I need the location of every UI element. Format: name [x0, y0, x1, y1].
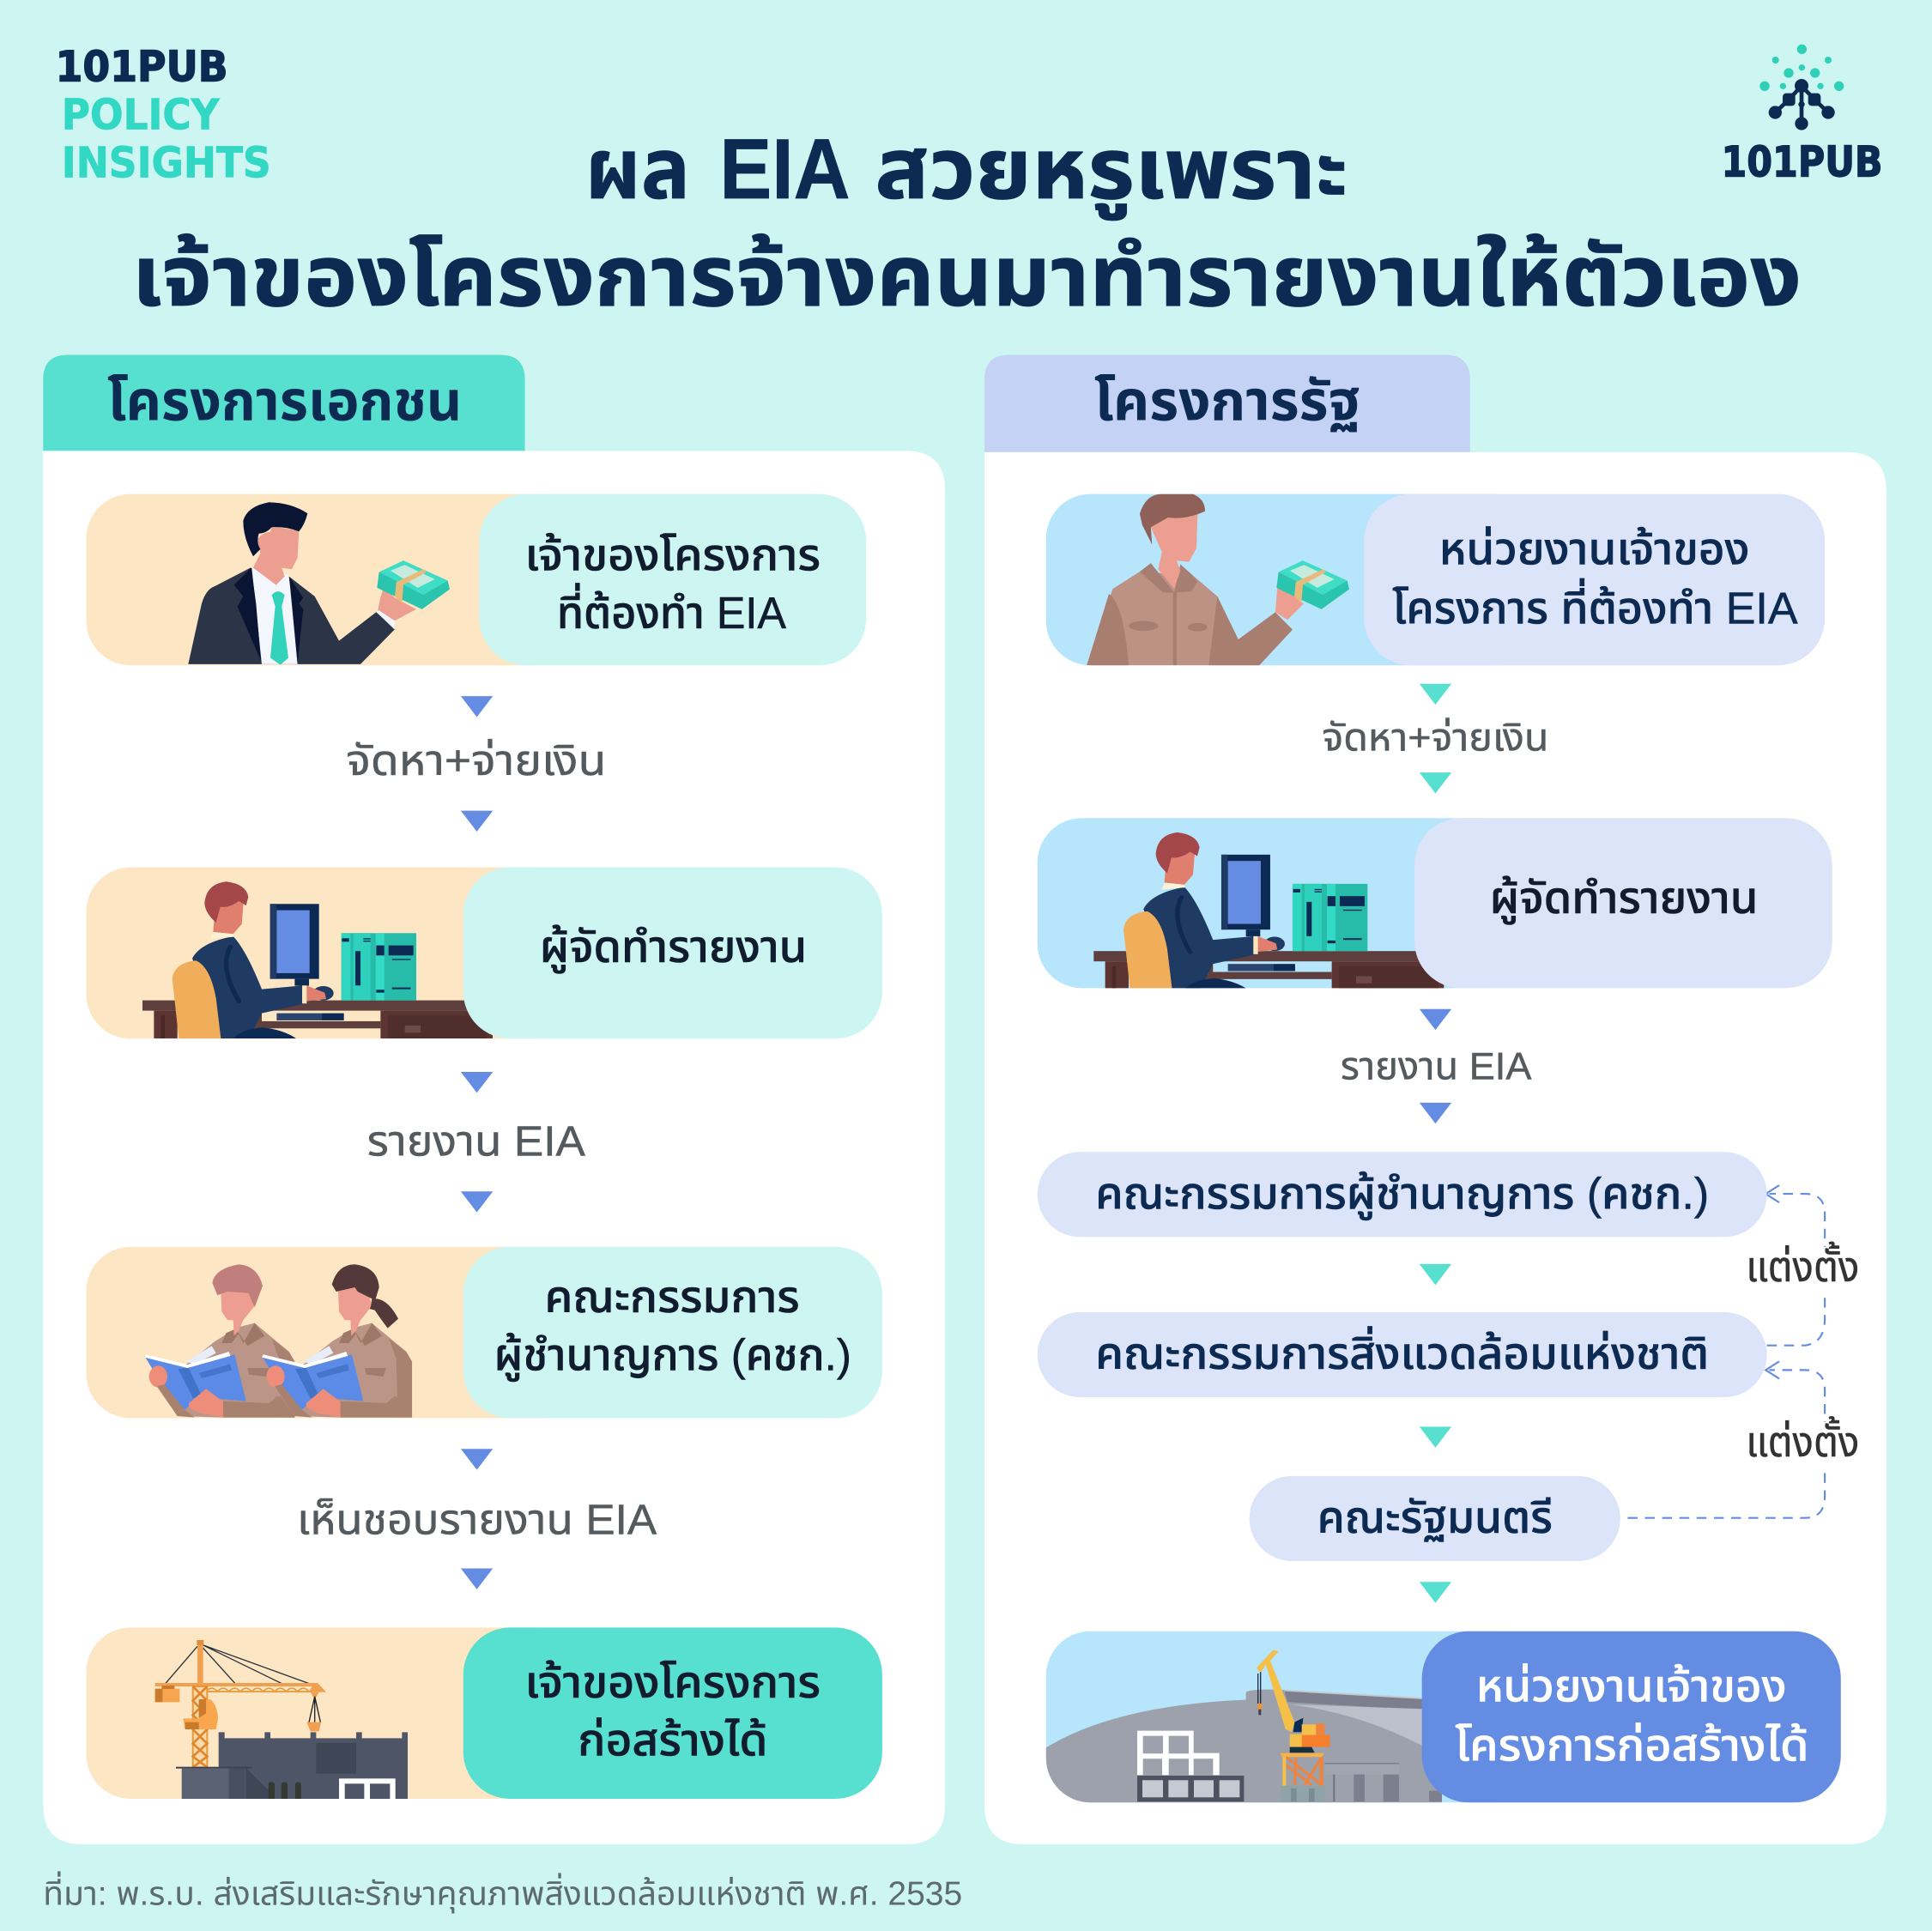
arrow [1420, 1103, 1451, 1123]
label: EIA report: รายงาน EIA [367, 1119, 585, 1165]
step: report preparer [86, 868, 882, 1038]
label: provide and pay: จัดหา+จ่ายเงิน [346, 738, 606, 784]
label: appoint 2: แต่งตั้ง [1746, 1416, 1859, 1466]
icon: construction site [1045, 1650, 1442, 1805]
label: appoint 1: แต่งตั้ง [1746, 1241, 1859, 1291]
box: expert committee [1038, 1152, 1767, 1237]
source note: ที่มา: พ.ร.บ. ส่งเสริมและรักษาคุณภาพสิ่งแวดล้อมแห่งชาติ พ.ศ. 2535 [43, 1870, 962, 1913]
step: expert committee: ผู้ชำนาญการ (คชก.) [494, 1329, 851, 1382]
step: report preparer: ผู้จัดทำรายงาน [540, 922, 807, 974]
heading tab: state projects [984, 354, 1470, 452]
step: project owner: เจ้าของโครงการ [525, 530, 821, 580]
step: owner agency: โครงการ ที่ต้องทำ EIA [1392, 578, 1798, 633]
arrow [1420, 684, 1451, 705]
arrow [461, 1191, 493, 1213]
logo: 101PUB Policy Insights [56, 43, 271, 188]
logo: 101PUB network mark [1722, 45, 1883, 186]
panel background [43, 451, 945, 1844]
title: ผล [585, 121, 690, 216]
step: owner can build: เจ้าของโครงการ [525, 1657, 821, 1707]
step: agency can build: หน่วยงานเจ้าของ [1476, 1662, 1787, 1711]
box: national environment board [1038, 1312, 1767, 1397]
title: เจ้าของโครงการจ้างคนมาทำรายงานให้ตัวเอง [132, 228, 1802, 324]
icon: two readers [144, 1264, 412, 1418]
step: owner agency [1046, 494, 1825, 665]
dashed connectors: appointment [1627, 1185, 1825, 1518]
text pill [463, 1247, 882, 1418]
text pill [1414, 818, 1832, 988]
title: สวยหรูเพราะ [875, 121, 1348, 221]
arrow [1420, 1009, 1451, 1030]
step: owner agency: หน่วยงานเจ้าของ [1439, 524, 1750, 574]
label: approve EIA report: เห็นชอบรายงาน EIA [297, 1497, 657, 1543]
text pill [463, 1627, 882, 1799]
step: agency can build: โครงการก่อสร้างได้ [1455, 1720, 1808, 1770]
title: EIA [719, 121, 851, 216]
label: provide and pay: จัดหา+จ่ายเงิน [1322, 717, 1549, 759]
text pill [1364, 494, 1825, 665]
step: owner can build [86, 1627, 882, 1802]
logo: 101PUB Policy Insights: 101PUB [56, 43, 228, 92]
logo: 101PUB Policy Insights: INSIGHTS [62, 139, 271, 188]
arrow [1420, 772, 1451, 794]
box: cabinet: คณะรัฐมนตรี [1317, 1492, 1553, 1542]
icon: person at desk [1093, 832, 1444, 990]
arrow [461, 1569, 493, 1589]
arrow [1420, 1582, 1451, 1603]
heading tab: private projects: โครงการเอกชน [107, 371, 462, 433]
arrow [1420, 1264, 1451, 1285]
step: project owner [86, 494, 866, 665]
icon: person at desk [142, 881, 493, 1038]
box: national environment board: คณะกรรมการสิ่งแวดล้อมแห่งชาติ [1095, 1326, 1709, 1378]
box: cabinet [1250, 1476, 1620, 1561]
step: agency can build [1045, 1631, 1841, 1805]
text pill [463, 868, 882, 1038]
arrow [461, 696, 493, 717]
box: expert committee: คณะกรรมการผู้ชำนาญการ (คชก.) [1095, 1168, 1709, 1220]
icon: tower crane and building [155, 1640, 408, 1802]
panel: state projects [984, 354, 1887, 1844]
text pill [479, 494, 866, 665]
step: owner can build: ก่อสร้างได้ [578, 1716, 767, 1765]
heading tab: private projects [43, 354, 525, 451]
icon: businessman holding money [188, 502, 450, 665]
step: report preparer [1038, 818, 1832, 990]
logo: 101PUB Policy Insights: POLICY [62, 91, 220, 140]
title [132, 121, 1802, 324]
icon: officer holding money [1087, 494, 1349, 665]
step: expert committee [86, 1247, 882, 1418]
arrow [461, 811, 493, 832]
step: expert committee: คณะกรรมการ [545, 1272, 800, 1322]
heading tab: state projects: โครงการรัฐ [1094, 371, 1360, 433]
step: report preparer: ผู้จัดทำรายงาน [1490, 873, 1759, 925]
arrow [461, 1449, 493, 1470]
arrow [461, 1072, 493, 1093]
step: project owner: ที่ต้องทำ EIA [557, 583, 786, 638]
label: EIA report: รายงาน EIA [1341, 1046, 1532, 1088]
panel background [984, 452, 1887, 1844]
text pill [1422, 1631, 1841, 1802]
arrow [1420, 1426, 1451, 1448]
logo: 101PUB network mark: 101PUB [1722, 137, 1883, 186]
panel: private projects [43, 354, 945, 1844]
